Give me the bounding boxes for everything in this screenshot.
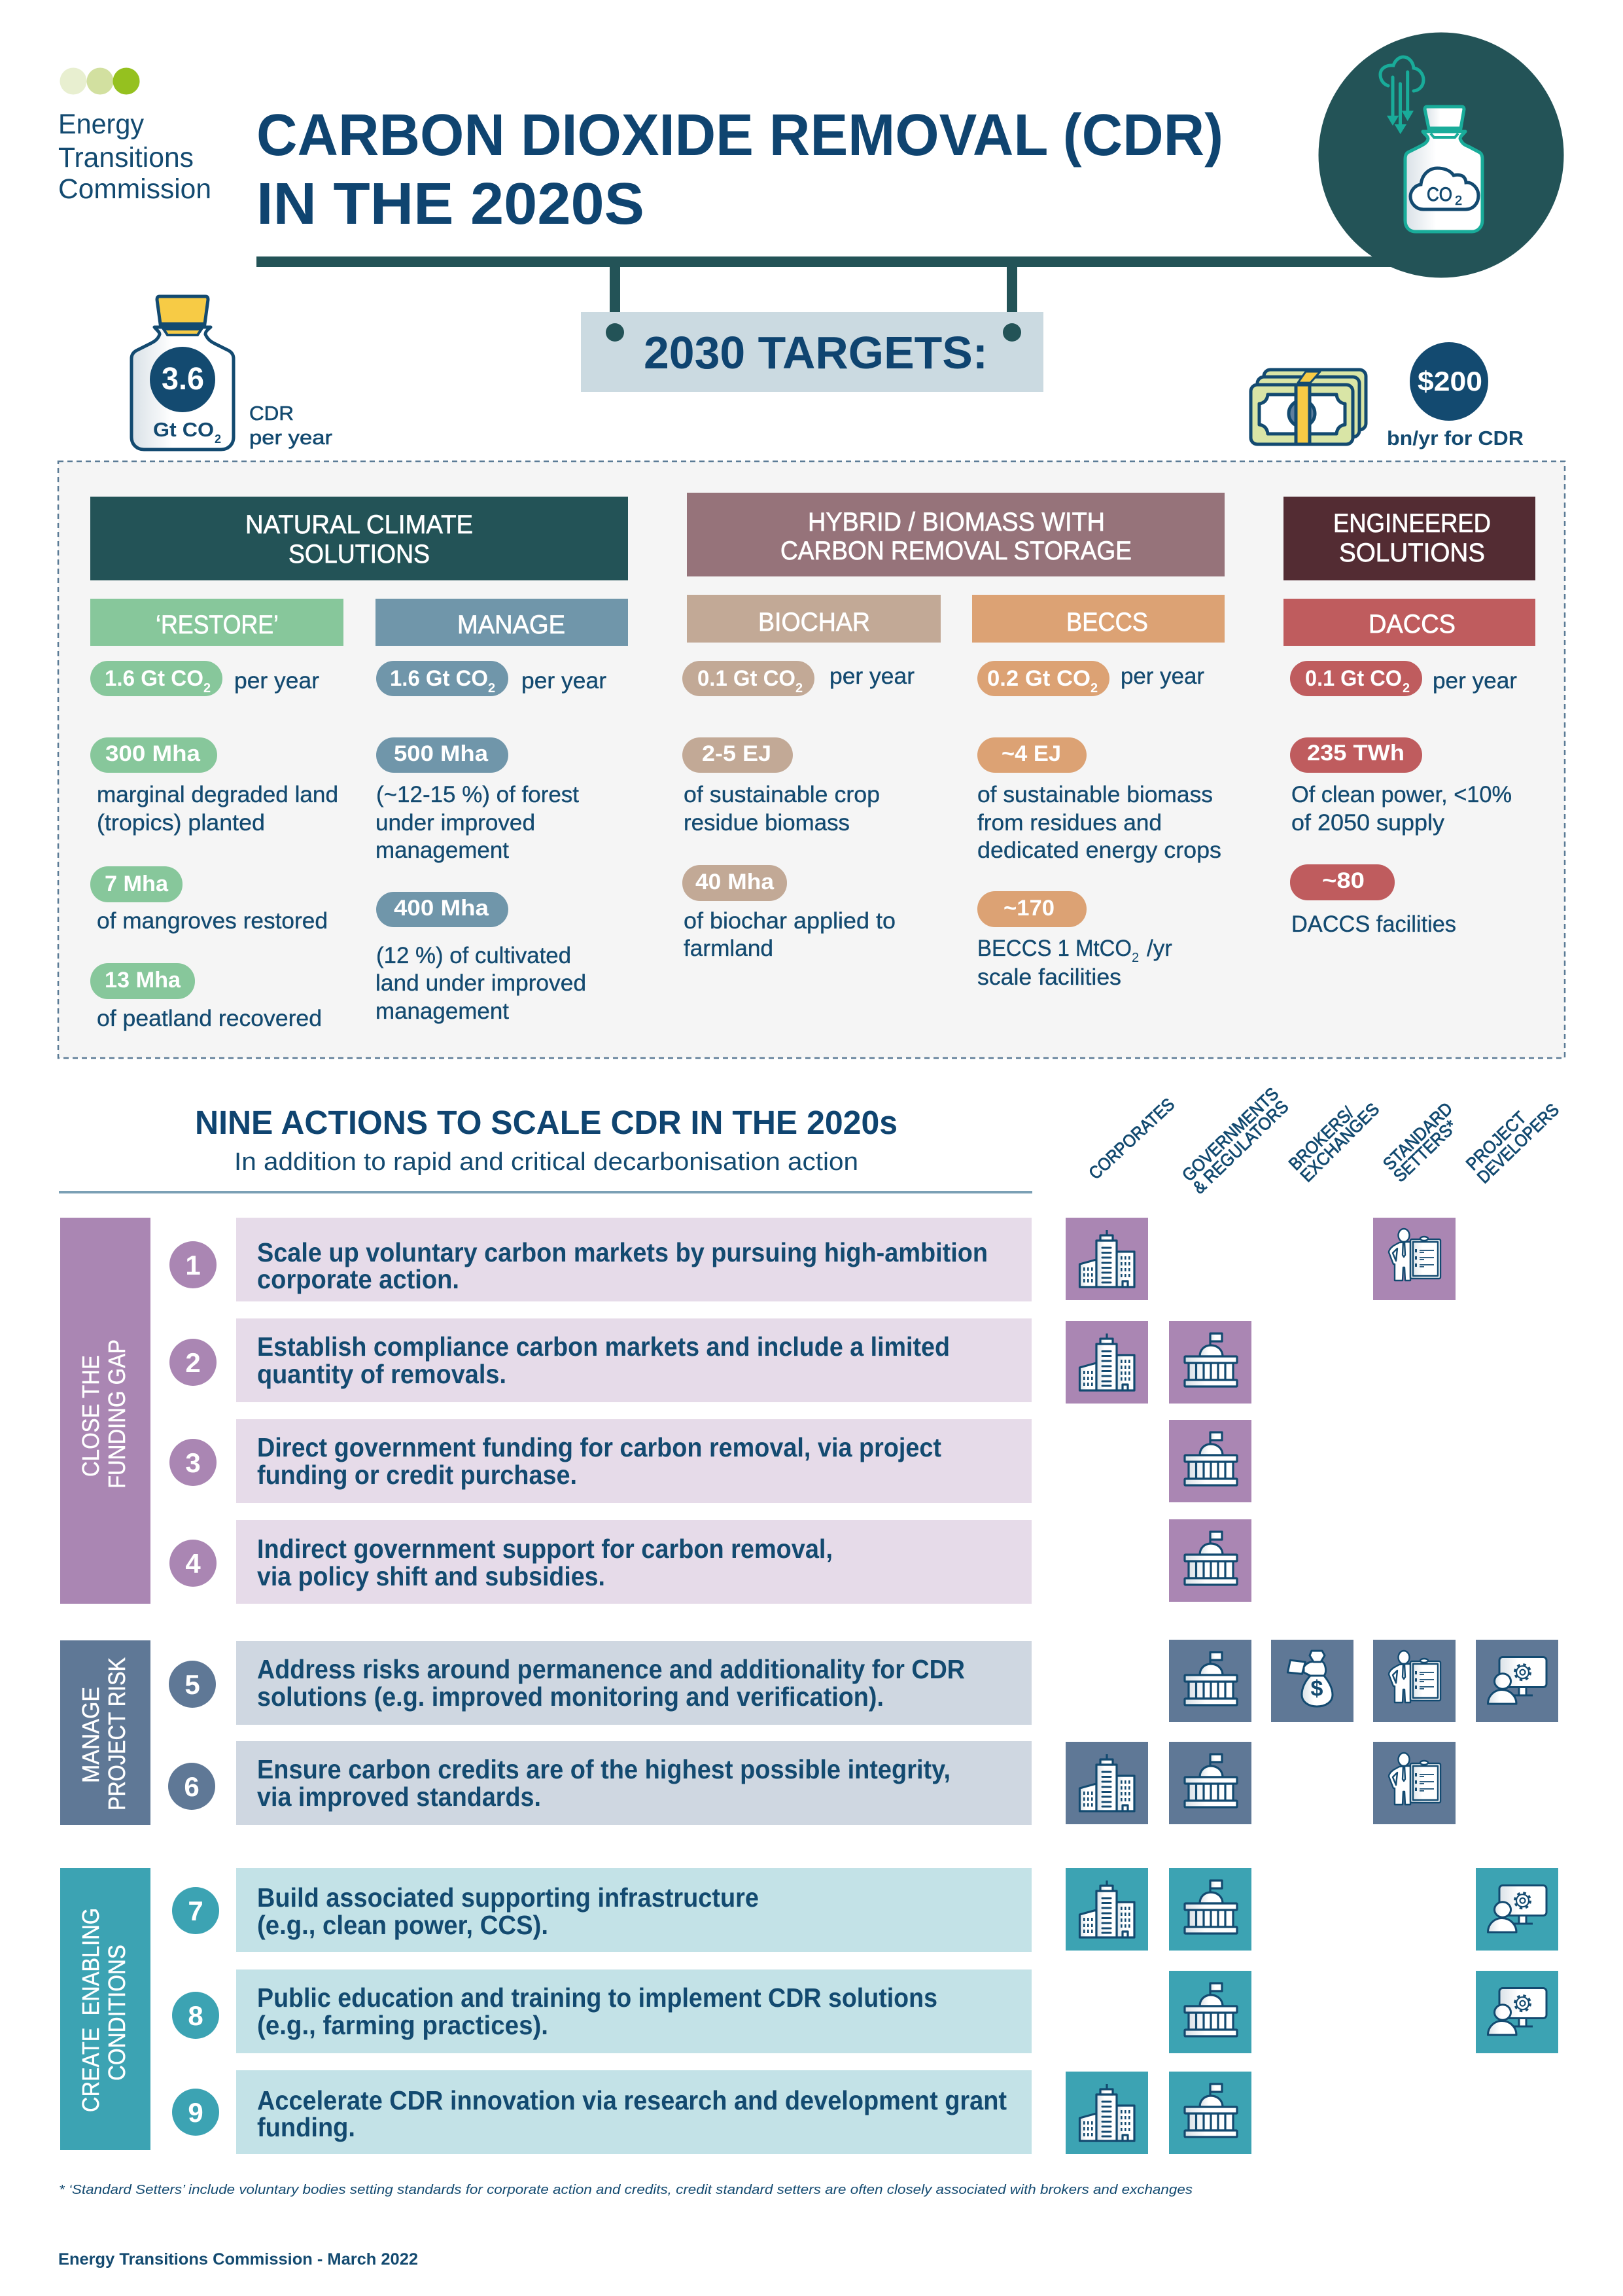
column: BECCS: ~4 EJ [1002, 741, 1061, 766]
action 6: 6 [184, 1771, 200, 1802]
action 5: Address risks around permanence and additionality for CDR [257, 1654, 965, 1684]
action 4: via policy shift and subsidies. [257, 1561, 605, 1591]
column: DACCS [1283, 599, 1535, 937]
sign: 2030 targets [581, 312, 1043, 392]
side label: create enabling conditions [60, 1868, 150, 2150]
icon: money stack [1251, 370, 1366, 444]
column: BECCS: 2 [1132, 951, 1139, 965]
icon: standard setters, row 1 [1373, 1218, 1456, 1300]
column: manage: 1.6 Gt CO [390, 666, 488, 691]
icon: corporates, row 2 [1066, 1321, 1148, 1404]
column: BECCS: per year [1121, 663, 1204, 689]
column labels: stakeholders: DEVELOPERS [1473, 1100, 1563, 1187]
icon: 3.6 Gt CO2 bottle: Gt CO [153, 418, 214, 441]
side label: create enabling conditions: CONDITIONS [103, 1945, 130, 2081]
icon: CO2 bottle in circle: CO [1427, 184, 1452, 205]
column: manage: (12 %) of cultivated [376, 943, 571, 968]
action 3: Direct government funding for carbon removal, via project [257, 1432, 941, 1462]
action 2: 2 [185, 1347, 201, 1378]
action 9: funding. [257, 2112, 355, 2142]
column: restore: ‘RESTORE’ [156, 610, 279, 639]
column: restore: 1.6 Gt CO [105, 666, 203, 691]
column: restore: marginal degraded land [97, 782, 338, 807]
action 4 [169, 1520, 1032, 1604]
column: manage: management [375, 998, 509, 1024]
column: BECCS [972, 595, 1225, 990]
column: DACCS: Of clean power, <10% [1291, 782, 1512, 807]
action 7: 7 [188, 1896, 203, 1926]
column: manage: 2 [488, 681, 495, 696]
icon: governments, row 3 [1169, 1420, 1251, 1502]
heading: engineered solutions [1283, 497, 1535, 580]
icon: 3.6 Gt CO2 bottle: 3.6 [162, 362, 204, 397]
column: BECCS: from residues and [977, 810, 1162, 836]
column: DACCS: 2 [1403, 681, 1410, 696]
icon: governments, row 5 [1169, 1640, 1251, 1722]
column labels: stakeholders: EXCHANGES [1297, 1099, 1383, 1186]
column: BECCS: ~170 [1003, 896, 1055, 921]
column: biochar: 2 [795, 681, 803, 696]
heading: hybrid / biomass with carbon removal storage: CARBON REMOVAL STORAGE [780, 537, 1132, 565]
logo: Energy Transitions Commission: Commission [58, 173, 211, 205]
column: DACCS: ~80 [1322, 868, 1365, 893]
panel: 2030 targets by solution [58, 461, 1565, 1058]
icon: CO2 bottle in circle [1319, 33, 1563, 277]
action 2 [169, 1318, 1032, 1402]
action 7 [172, 1868, 1032, 1952]
column: BECCS: scale facilities [977, 964, 1121, 990]
heading: nine actions: NINE ACTIONS TO SCALE CDR IN THE 2020s [195, 1104, 898, 1141]
column: manage: land under improved [375, 970, 586, 996]
action 1: 1 [185, 1250, 201, 1280]
column: BECCS: BECCS [1066, 608, 1148, 637]
icon: standard setters, row 5 [1373, 1640, 1456, 1722]
action 1: corporate action. [257, 1264, 459, 1294]
column: DACCS: 0.1 Gt CO [1305, 666, 1402, 691]
column: BECCS: of sustainable biomass [977, 782, 1213, 807]
action 7: Build associated supporting infrastructure [257, 1882, 759, 1913]
side label: create enabling conditions: CREATE ENABLING [77, 1908, 104, 2112]
column: biochar: residue biomass [684, 810, 850, 836]
action 4: Indirect government support for carbon removal, [257, 1534, 833, 1564]
column labels: stakeholders: PROJECT [1462, 1108, 1530, 1174]
side label: close the funding gap [60, 1218, 150, 1604]
column: DACCS: DACCS facilities [1291, 911, 1456, 937]
heading: nine actions [59, 1104, 1032, 1193]
side label: manage project risk: PROJECT RISK [103, 1657, 130, 1810]
action 3: funding or credit purchase. [257, 1460, 577, 1490]
column labels: stakeholders: BROKERS/ [1285, 1103, 1357, 1174]
action 6: Ensure carbon credits are of the highest possible integrity, [257, 1754, 951, 1784]
column: BECCS: 0.2 Gt CO [987, 666, 1091, 691]
icon: corporates, row 7 [1066, 1868, 1148, 1951]
icon: brokers money bag, row 5: $ [1311, 1676, 1323, 1701]
action 5: 5 [184, 1669, 200, 1700]
icon: project developers, row 8 [1476, 1971, 1558, 2053]
column: restore: per year [234, 668, 319, 694]
icon: governments, row 6 [1169, 1742, 1251, 1824]
heading: engineered solutions: SOLUTIONS [1339, 539, 1485, 567]
icon: brokers money bag, row 5 [1271, 1640, 1353, 1722]
heading: hybrid / biomass with carbon removal storage: HYBRID / BIOMASS WITH [808, 508, 1105, 537]
column: BECCS: BECCS 1 MtCO [977, 936, 1132, 961]
column: restore: 7 Mha [105, 872, 169, 896]
heading: engineered solutions: ENGINEERED [1333, 509, 1491, 538]
column: biochar: 0.1 Gt CO [697, 666, 795, 691]
badge: $200 bn/yr for CDR: $200 [1418, 366, 1482, 397]
column: DACCS: of 2050 supply [1291, 810, 1445, 836]
column: biochar: of biochar applied to [684, 908, 896, 934]
column: restore: 300 Mha [105, 741, 201, 766]
logo: Energy Transitions Commission: Energy [58, 109, 144, 140]
title: CARBON DIOXIDE REMOVAL (CDR) [256, 103, 1223, 168]
column: manage: (~12-15 %) of forest [376, 782, 579, 807]
action 4: 4 [185, 1548, 201, 1579]
action 1: Scale up voluntary carbon markets by pursuing high-ambition [257, 1237, 988, 1267]
column: BECCS: /yr [1147, 936, 1172, 961]
footnote: * ‘Standard Setters’ include voluntary bodies setting standards for corporate action and credits, credit standard setters are often closely associated with brokers and exchanges [59, 2183, 1193, 2197]
column: manage: 400 Mha [394, 896, 489, 921]
column: biochar: BIOCHAR [758, 608, 870, 637]
action 8: Public education and training to implement CDR solutions [257, 1983, 937, 2013]
icon: governments, row 9 [1169, 2072, 1251, 2154]
logo: Energy Transitions Commission: Transitions [58, 142, 194, 173]
column: restore [90, 599, 343, 1031]
column: restore: (tropics) planted [97, 810, 265, 836]
action 8: (e.g., farming practices). [257, 2010, 548, 2040]
action 3 [169, 1419, 1032, 1503]
action 8: 8 [188, 2000, 203, 2031]
action 5 [169, 1641, 1032, 1725]
column: manage: per year [521, 668, 606, 694]
heading: natural climate solutions [90, 497, 628, 580]
icon: governments, row 4 [1169, 1519, 1251, 1602]
action 9 [172, 2070, 1032, 2154]
column: restore: of peatland recovered [97, 1006, 322, 1031]
column: biochar: of sustainable crop [684, 782, 880, 807]
icon: project developers, row 5 [1476, 1640, 1558, 1722]
column: biochar: 2-5 EJ [702, 741, 771, 766]
icon: governments, row 8 [1169, 1971, 1251, 2053]
column: biochar: per year [829, 663, 915, 689]
icon: standard setters, row 6 [1373, 1742, 1456, 1824]
footer credit: Energy Transitions Commission - March 2022 [58, 2250, 418, 2269]
side label: close the funding gap: FUNDING GAP [103, 1339, 130, 1489]
header bar with hangers [256, 256, 1408, 314]
column labels: stakeholders: & REGULATORS [1189, 1097, 1293, 1197]
column: biochar: 40 Mha [695, 870, 775, 894]
column: manage: management [375, 838, 509, 863]
column labels: stakeholders [1085, 1084, 1563, 1197]
action 2: Establish compliance carbon markets and include a limited [257, 1332, 950, 1362]
title [256, 103, 1223, 237]
column: restore: 13 Mha [105, 968, 181, 993]
badge: $200 bn/yr for CDR: bn/yr for CDR [1387, 427, 1524, 450]
heading: hybrid / biomass with carbon removal storage [687, 493, 1225, 576]
column: DACCS: DACCS [1369, 610, 1456, 639]
column: biochar [682, 595, 941, 961]
column: biochar: farmland [684, 936, 773, 961]
action 3: 3 [185, 1447, 201, 1478]
action 6: via improved standards. [257, 1782, 541, 1812]
action 7: (e.g., clean power, CCS). [257, 1910, 548, 1940]
side label: manage project risk: MANAGE [77, 1687, 104, 1783]
column: DACCS: per year [1433, 668, 1517, 694]
icon: CO2 bottle in circle: 2 [1455, 194, 1462, 208]
action 9: Accelerate CDR innovation via research and development grant [257, 2085, 1007, 2115]
column: BECCS: 2 [1091, 681, 1098, 696]
column labels: stakeholders: GOVERNMENTS [1178, 1084, 1282, 1185]
action 6 [168, 1741, 1032, 1825]
action 9: 9 [188, 2097, 203, 2128]
side label: manage project risk [60, 1640, 150, 1825]
icon: 3.6 Gt CO2 bottle: 2 [215, 433, 221, 446]
icon: corporates, row 6 [1066, 1742, 1148, 1824]
column: restore: of mangroves restored [97, 908, 328, 934]
column: restore: 2 [203, 681, 211, 696]
action 8 [172, 1969, 1032, 2053]
action 5: solutions (e.g. improved monitoring and verification). [257, 1682, 884, 1712]
column labels: stakeholders: CORPORATES [1085, 1095, 1178, 1183]
side label: close the funding gap: CLOSE THE [77, 1355, 104, 1477]
heading: nine actions: In addition to rapid and critical decarbonisation action [234, 1148, 858, 1176]
column: DACCS: 235 TWh [1307, 741, 1405, 766]
text: CDR per year: per year [249, 426, 332, 449]
sign: 2030 targets: 2030 TARGETS: [644, 327, 988, 378]
column labels: stakeholders: STANDARD [1379, 1099, 1456, 1174]
icon: governments, row 7 [1169, 1868, 1251, 1951]
column labels: stakeholders: SETTERS* [1389, 1116, 1461, 1186]
icon: governments, row 2 [1169, 1321, 1251, 1404]
column: manage: under improved [375, 810, 535, 836]
column: manage: 500 Mha [394, 741, 489, 766]
icon: corporates, row 1 [1066, 1218, 1148, 1300]
action 1 [169, 1218, 1032, 1301]
heading: natural climate solutions: SOLUTIONS [288, 540, 430, 569]
title: IN THE 2020S [256, 171, 644, 237]
logo: Energy Transitions Commission [58, 68, 211, 205]
icon: project developers, row 7 [1476, 1868, 1558, 1951]
icon: corporates, row 9 [1066, 2072, 1148, 2154]
column: manage [375, 599, 628, 1024]
column: BECCS: dedicated energy crops [977, 838, 1221, 863]
heading: natural climate solutions: NATURAL CLIMATE [245, 510, 473, 539]
text: CDR per year: CDR [249, 402, 294, 425]
column: manage: MANAGE [457, 610, 565, 639]
icon: 3.6 Gt CO2 bottle [131, 296, 234, 450]
badge: $200 bn/yr for CDR [1387, 342, 1524, 450]
text: CDR per year [249, 402, 332, 449]
action 2: quantity of removals. [257, 1359, 506, 1389]
